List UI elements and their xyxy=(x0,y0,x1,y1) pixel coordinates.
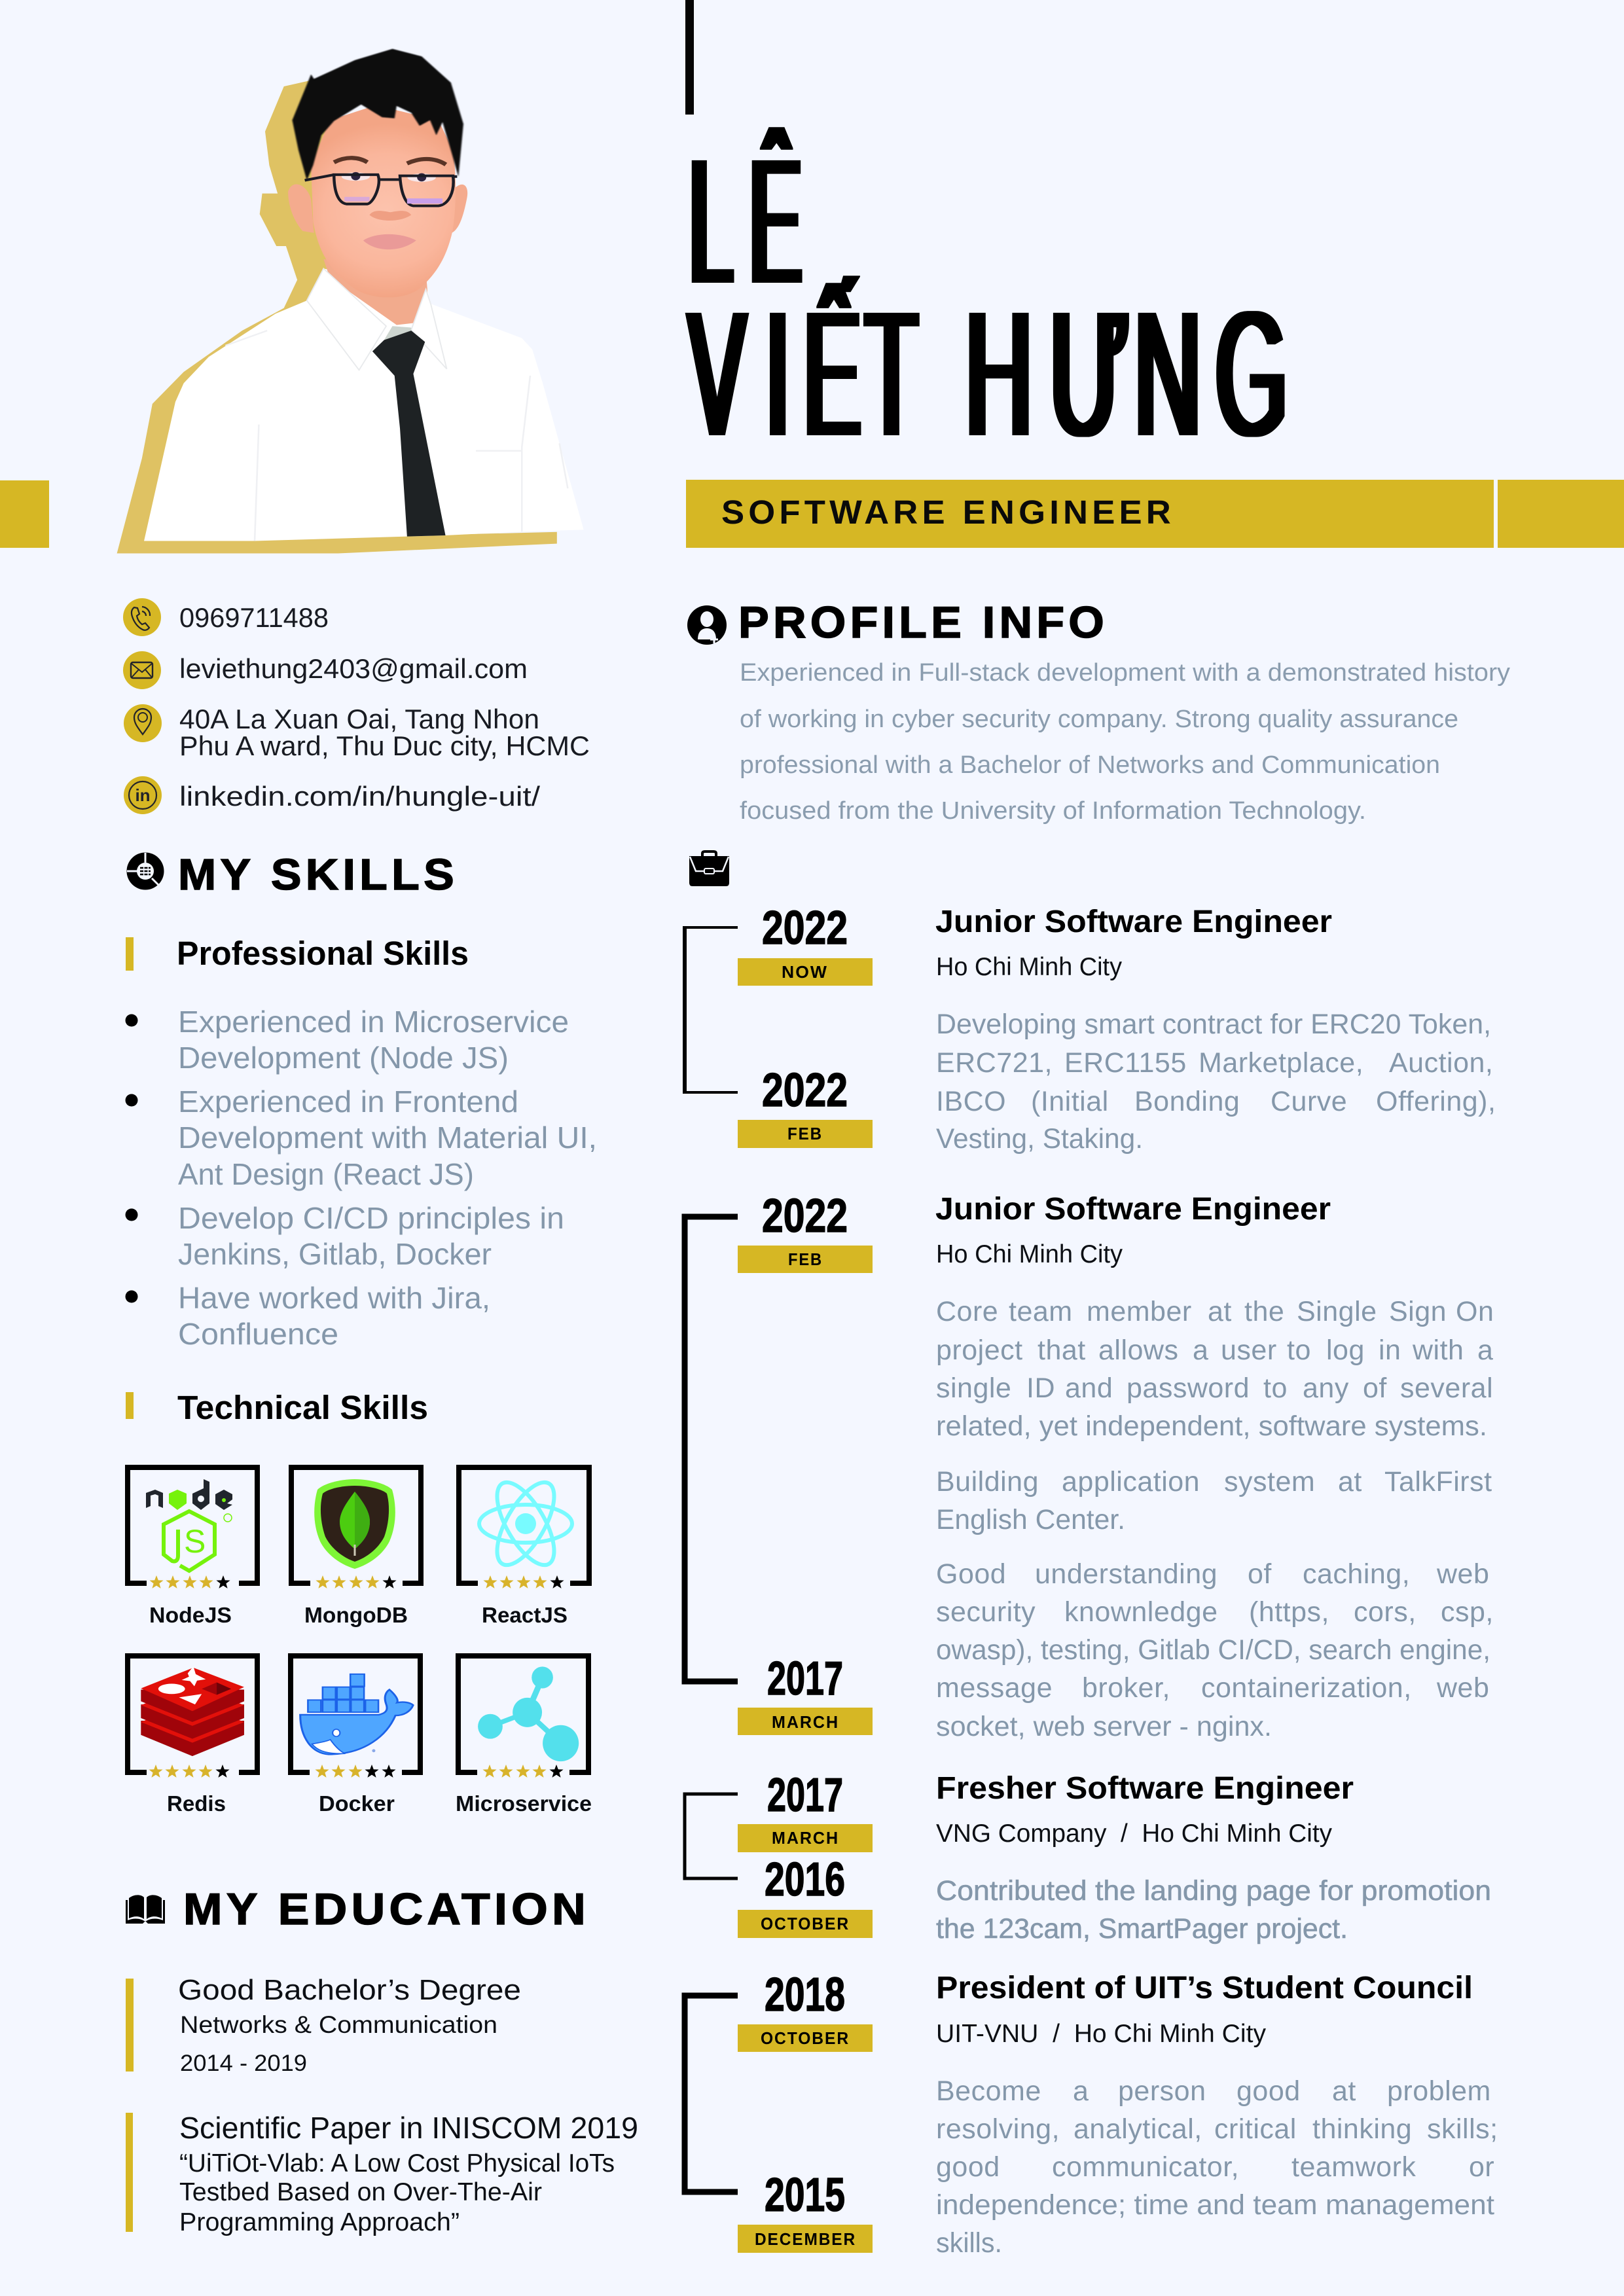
icon: nodejs: S xyxy=(184,1523,206,1560)
top vertical bar xyxy=(685,0,694,115)
job description: SSO: related, yet independent, software systems. xyxy=(936,1410,1487,1442)
skill card: ReactJS xyxy=(459,1467,589,1627)
job description: SSO: of xyxy=(1363,1372,1387,1404)
rating stars xyxy=(482,1765,564,1778)
icon: nodejs xyxy=(146,1479,232,1571)
date: 2017 march xyxy=(738,1653,873,1735)
role description: communicator, xyxy=(1052,2151,1239,2183)
skill label: ReactJS xyxy=(482,1603,568,1627)
skill item 1 xyxy=(126,1005,569,1075)
skill item 3: Jenkins, Gitlab, Docker xyxy=(178,1237,492,1271)
job description: Contributed the landing page for promotion xyxy=(936,1875,1491,1907)
profile summary: focused from the University of Information Technology. xyxy=(740,797,1366,825)
icon: phone xyxy=(123,598,161,636)
job description: (Initial xyxy=(1031,1086,1109,1117)
date: 2017 march: 2017 xyxy=(767,1653,843,1705)
date: 2022 feb xyxy=(738,1064,873,1148)
role description: person xyxy=(1118,2075,1206,2107)
title: first name: LÊ xyxy=(689,122,802,321)
icon: briefcase xyxy=(689,852,729,886)
rating stars xyxy=(315,1765,396,1778)
job description: Developing smart contract for ERC20 Token, xyxy=(936,1009,1491,1040)
skill card: Redis xyxy=(128,1656,257,1816)
job description: SSO: a xyxy=(1193,1335,1208,1366)
glasses xyxy=(305,175,457,206)
job description: TalkFirst: English Center. xyxy=(936,1504,1125,1535)
eyes xyxy=(342,172,436,182)
job description: SSO: to xyxy=(1263,1372,1288,1404)
role description: problem xyxy=(1387,2075,1491,2107)
education: bachelor degree xyxy=(126,1974,521,2076)
role description: a xyxy=(1073,2075,1089,2107)
skill item 2: Development with Material UI, xyxy=(178,1121,597,1155)
job description: knowledge: (https, xyxy=(1249,1596,1329,1628)
role description: critical xyxy=(1214,2113,1297,2145)
linkedin url: linkedin.com/in/hungle-uit/ xyxy=(179,781,540,812)
job description: Marketplace, xyxy=(1199,1047,1363,1079)
job description: knowledge: containerization, xyxy=(1201,1672,1412,1704)
job 2 entry xyxy=(935,1192,1494,1742)
job description: SSO: team xyxy=(1009,1296,1073,1327)
date: 2017 march: MARCH xyxy=(772,1712,839,1732)
heading: my education: MY EDUCATION xyxy=(183,1884,590,1934)
job description: knowledge: web xyxy=(1436,1558,1489,1590)
ears xyxy=(288,184,467,233)
lips xyxy=(363,234,416,249)
heading: profile info: PROFILE INFO xyxy=(738,598,1108,647)
job description: knowledge: understanding xyxy=(1035,1558,1218,1590)
contact details xyxy=(123,598,590,814)
job description: ERC1155 xyxy=(1064,1047,1187,1079)
job title: Fresher Software Engineer xyxy=(936,1771,1354,1806)
skill item 1: Development (Node JS) xyxy=(178,1041,509,1075)
job description: SSO: Single xyxy=(1297,1296,1377,1327)
education: scientific paper: Programming Approach” xyxy=(179,2208,460,2236)
job description: SSO: ID xyxy=(1026,1372,1055,1404)
job description: knowledge: of xyxy=(1248,1558,1272,1590)
icon: location xyxy=(124,704,162,742)
education: scientific paper: Testbed Based on Over-The-Air xyxy=(179,2178,542,2206)
timeline bracket: role 4 xyxy=(685,1996,738,2192)
degree major: Networks & Communication xyxy=(180,2011,497,2038)
date: 2018 october: 2018 xyxy=(765,1969,845,2021)
white shirt xyxy=(144,268,584,541)
skill label: MongoDB xyxy=(304,1603,408,1627)
job description: SSO: project xyxy=(936,1335,1023,1366)
job description: SSO: in xyxy=(1379,1335,1401,1366)
paper title: Scientific Paper in INISCOM 2019 xyxy=(179,2111,638,2145)
profile summary xyxy=(740,659,1510,825)
portrait photo xyxy=(117,49,584,554)
role description: Become xyxy=(936,2075,1041,2107)
role description: skills; xyxy=(1427,2113,1498,2145)
skill item 2: Experienced in Frontend xyxy=(178,1085,518,1119)
role description: teamwork xyxy=(1291,2151,1416,2183)
job description xyxy=(936,1009,1496,1155)
skill item 4: Have worked with Jira, xyxy=(178,1281,490,1315)
degree title: Good Bachelor’s Degree xyxy=(178,1974,521,2006)
skill item 2 xyxy=(126,1085,597,1191)
timeline bracket: job 2 xyxy=(685,1217,738,1681)
job title banner xyxy=(686,480,1624,548)
job description: TalkFirst xyxy=(936,1466,1492,1535)
job description: Auction, xyxy=(1389,1047,1493,1079)
paper description: “UiTiOt-Vlab: A Low Cost Physical IoTs xyxy=(179,2149,615,2178)
job description: Curve xyxy=(1271,1086,1347,1117)
date: 2022 feb: FEB xyxy=(788,1249,823,1269)
date: 2022 feb: FEB xyxy=(787,1124,823,1143)
address line 2: Phu A ward, Thu Duc city, HCMC xyxy=(179,730,590,761)
job description: SSO: On xyxy=(1456,1296,1494,1327)
heading: my skills: MY SKILLS xyxy=(178,850,458,899)
icon: email xyxy=(123,651,161,689)
job description: knowledge: owasp), testing, Gitlab CI/CD, search engine, xyxy=(936,1634,1490,1666)
job description: Bonding xyxy=(1134,1086,1240,1117)
job description: TalkFirst: Building xyxy=(936,1466,1039,1498)
skill item 1: Experienced in Microservice xyxy=(178,1005,569,1039)
collar xyxy=(307,268,446,370)
date: 2022 now: 2022 xyxy=(762,902,848,954)
job description: Vesting, Staking. xyxy=(936,1123,1143,1155)
skill label: NodeJS xyxy=(149,1603,232,1627)
job description: the 123cam, SmartPager project. xyxy=(936,1913,1348,1945)
job description: knowledge: cors, xyxy=(1354,1596,1416,1628)
job description: SSO: that xyxy=(1038,1335,1086,1366)
job description: SSO: password xyxy=(1127,1372,1250,1404)
job description: SSO xyxy=(936,1296,1494,1442)
phone number: 0969711488 xyxy=(179,602,329,633)
job description xyxy=(936,1875,1491,1945)
job title text: SOFTWARE ENGINEER xyxy=(721,493,1175,531)
shirt folds xyxy=(225,331,568,541)
job location: Ho Chi Minh City xyxy=(936,1240,1123,1268)
icon: redis xyxy=(141,1666,244,1756)
role description: good xyxy=(936,2151,1000,2183)
job description: knowledge: socket, web server - nginx. xyxy=(936,1711,1272,1742)
title: last name: VIẾT xyxy=(689,275,918,474)
technical skills heading: Technical Skills xyxy=(177,1389,428,1426)
job title: Junior Software Engineer xyxy=(935,1192,1331,1227)
title: last name: HƯNG xyxy=(965,274,1288,473)
date: 2015 december: 2015 xyxy=(765,2169,845,2221)
role description: independence; time and team management xyxy=(936,2189,1494,2221)
nose xyxy=(369,211,411,221)
job description: SSO: Sign xyxy=(1389,1296,1447,1327)
job description: SSO: to xyxy=(1287,1335,1311,1366)
job description: SSO: member xyxy=(1087,1296,1192,1327)
job 3 entry xyxy=(936,1771,1491,1945)
skill item 3: Develop CI/CD principles in xyxy=(178,1201,564,1235)
job description: knowledge: knownledge xyxy=(1064,1596,1218,1628)
undershirt collar xyxy=(384,326,411,340)
icon: mongodb xyxy=(314,1479,395,1569)
job 1 entry xyxy=(935,905,1496,1155)
skill label: Microservice xyxy=(456,1791,592,1816)
date: 2015 december: DECEMBER xyxy=(755,2229,856,2249)
professional skills list xyxy=(126,1005,597,1351)
left gold accent block xyxy=(0,480,49,548)
job location: VNG Company / Ho Chi Minh City xyxy=(936,1820,1332,1848)
job description: Offering), xyxy=(1376,1086,1496,1117)
email address: leviethung2403@gmail.com xyxy=(179,653,528,684)
job description: TalkFirst: system xyxy=(1224,1466,1315,1498)
date: 2018 october: OCTOBER xyxy=(761,2028,850,2048)
job description: TalkFirst: TalkFirst xyxy=(1384,1466,1492,1498)
role description: resolving, xyxy=(936,2113,1060,2145)
date: 2017 march xyxy=(738,1769,873,1852)
job description: SSO: Core xyxy=(936,1296,998,1327)
role description: at xyxy=(1332,2075,1356,2107)
date: 2017 march: MARCH xyxy=(772,1828,839,1848)
job description: SSO: single xyxy=(936,1372,1011,1404)
gold silhouette shadow xyxy=(117,75,557,554)
job title: Junior Software Engineer xyxy=(935,905,1332,939)
address line 1: 40A La Xuan Oai, Tang Nhon xyxy=(179,704,539,734)
job description: knowledge xyxy=(936,1558,1494,1742)
role location: UIT-VNU / Ho Chi Minh City xyxy=(936,2020,1266,2048)
date: 2022 feb: 2022 xyxy=(762,1190,848,1242)
job location: Ho Chi Minh City xyxy=(936,953,1122,981)
job description: SSO: any xyxy=(1303,1372,1349,1404)
icon: linkedin: in xyxy=(135,785,151,805)
role description: analytical, xyxy=(1074,2113,1202,2145)
skill item 4: Confluence xyxy=(178,1317,338,1351)
job description: SSO: a xyxy=(1477,1335,1493,1366)
job description: TalkFirst: application xyxy=(1062,1466,1200,1498)
professional skills heading: Professional Skills xyxy=(177,935,469,972)
date: 2016 october: 2016 xyxy=(765,1854,845,1906)
date: 2022 now: NOW xyxy=(782,962,828,982)
date: 2022 feb xyxy=(738,1190,873,1273)
job description: knowledge: caching, xyxy=(1303,1558,1410,1590)
icon: linkedin xyxy=(124,776,162,814)
job description: ERC721, xyxy=(936,1047,1053,1079)
skill card: Docker xyxy=(291,1656,420,1816)
job description: knowledge: broker, xyxy=(1082,1672,1170,1704)
icon: react xyxy=(479,1474,572,1573)
date: 2016 october: OCTOBER xyxy=(761,1914,850,1933)
rating stars xyxy=(483,1575,564,1588)
icon: docker xyxy=(300,1674,413,1754)
skill item 4 xyxy=(126,1281,490,1351)
skill label: Docker xyxy=(319,1791,395,1816)
neck xyxy=(323,259,428,325)
job description: SSO: several xyxy=(1400,1372,1493,1404)
job description: SSO: allows xyxy=(1098,1335,1178,1366)
job description: knowledge: security xyxy=(936,1596,1036,1628)
date: 2016 october xyxy=(738,1854,873,1938)
profile summary: of working in cyber security company. Strong quality assurance xyxy=(740,706,1458,733)
profile summary: Experienced in Full-stack development with a demonstrated history xyxy=(740,659,1510,687)
timeline bracket spine: job 1 xyxy=(683,926,687,1094)
job description: SSO: the xyxy=(1244,1296,1284,1327)
icon: profile xyxy=(687,605,727,645)
job description: SSO: with xyxy=(1412,1335,1464,1366)
job description: SSO: log xyxy=(1326,1335,1365,1366)
job description: IBCO xyxy=(936,1086,1006,1117)
skill label: Redis xyxy=(167,1791,226,1816)
role description: thinking xyxy=(1312,2113,1412,2145)
job description: knowledge: web xyxy=(1436,1672,1489,1704)
role description: skills. xyxy=(936,2227,1002,2259)
face xyxy=(311,105,456,297)
skill card: NodeJS xyxy=(128,1467,257,1627)
title: last name xyxy=(689,274,1288,474)
timeline bracket: job 3 xyxy=(685,1794,738,1878)
date: 2015 december xyxy=(738,2169,873,2253)
eyebrows xyxy=(334,158,446,164)
date: 2018 october xyxy=(738,1969,873,2052)
rating stars xyxy=(316,1575,397,1588)
job description: TalkFirst: at xyxy=(1338,1466,1362,1498)
profile summary: professional with a Bachelor of Networks and Communication xyxy=(740,751,1440,779)
necktie xyxy=(372,331,446,537)
rating stars xyxy=(149,1575,230,1588)
skill card: MongoDB xyxy=(291,1467,421,1627)
hair xyxy=(292,49,463,181)
job description: knowledge: Good xyxy=(936,1558,1006,1590)
job description: knowledge: message xyxy=(936,1672,1053,1704)
date: 2017 march: 2017 xyxy=(767,1769,843,1821)
role description: or xyxy=(1469,2151,1494,2183)
skill card: Microservice xyxy=(456,1656,592,1816)
date: 2022 now xyxy=(738,902,873,986)
role title: President of UIT’s Student Council xyxy=(936,1971,1473,2005)
skill item 3 xyxy=(126,1201,564,1271)
rating stars xyxy=(149,1765,230,1778)
job description: knowledge: csp, xyxy=(1441,1596,1494,1628)
degree years: 2014 - 2019 xyxy=(180,2051,307,2076)
skill item 2: Ant Design (React JS) xyxy=(178,1157,474,1191)
icon: microservice xyxy=(478,1666,579,1761)
date: 2022 feb: 2022 xyxy=(762,1064,848,1117)
job description: SSO: at xyxy=(1208,1296,1232,1327)
job description: SSO: and xyxy=(1065,1372,1113,1404)
role description xyxy=(936,2075,1498,2259)
role description: good xyxy=(1236,2075,1301,2107)
icon: book xyxy=(126,1895,165,1924)
role 4 entry xyxy=(936,1971,1498,2259)
icon: skills xyxy=(127,852,164,890)
timeline bracket: job 1 xyxy=(685,927,738,1092)
education: scientific paper xyxy=(126,2111,638,2236)
job description: SSO: user xyxy=(1221,1335,1277,1366)
